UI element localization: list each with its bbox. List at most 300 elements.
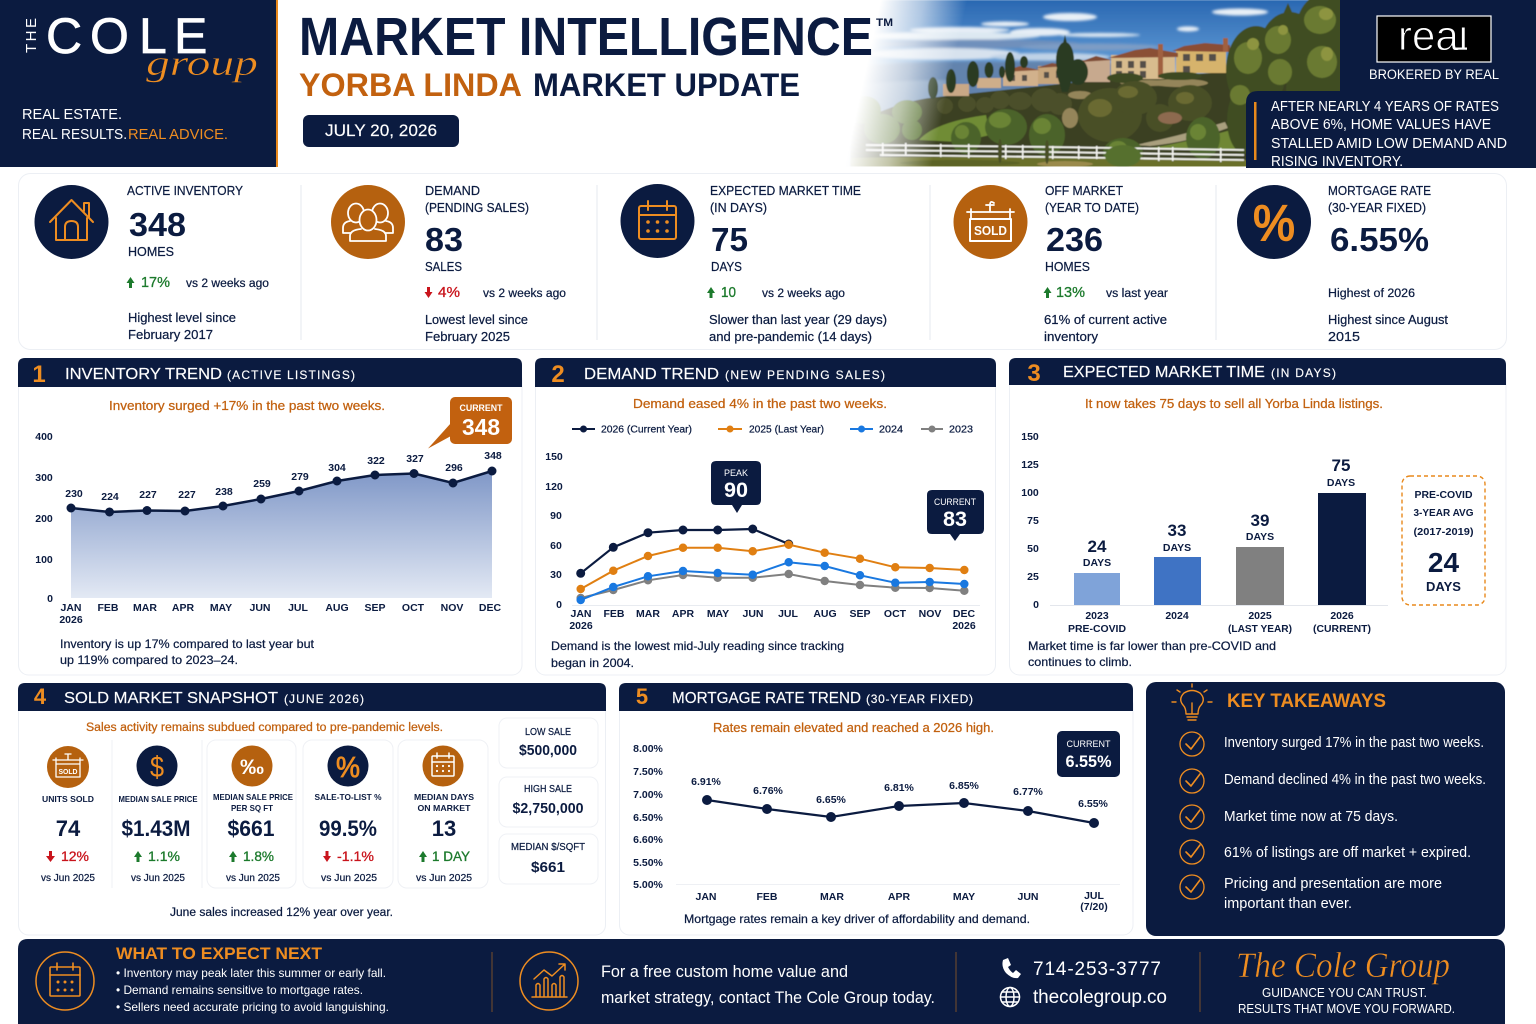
signature and slogan — [1236, 945, 1455, 1016]
KPI: mortgage rate: MORTGAGE RATE — [1328, 184, 1431, 198]
KPI: off market: inventory — [1044, 330, 1099, 344]
callout: peak 90: 90 — [724, 479, 748, 502]
header callout: STALLED AMID LOW DEMAND AND — [1271, 136, 1507, 152]
what to expect next: • Demand remains sensitive to mortgage rates. — [116, 983, 363, 997]
bar chart: 75 — [1332, 456, 1350, 475]
line chart: 7.00% — [633, 789, 664, 801]
KPI: mortgage rate: % — [1253, 195, 1295, 251]
stat: sale-to-list: SALE-TO-LIST % — [314, 792, 382, 802]
area chart: 279 — [291, 471, 309, 483]
stat: units sold — [41, 746, 95, 884]
KPI: demand: 4% — [438, 285, 460, 301]
KPI: active inventory: 348 — [129, 206, 186, 243]
note — [60, 637, 315, 667]
area chart: SEP — [364, 602, 386, 614]
line chart: JUN — [1017, 891, 1039, 903]
KPI: mortgage rate: Highest since August — [1328, 313, 1449, 327]
line chart: 2026 — [952, 620, 976, 632]
line chart: 6.55% — [1078, 798, 1109, 810]
KPI: mortgage rate — [1237, 184, 1449, 344]
bar chart: DAYS — [1083, 557, 1111, 569]
bar chart: 0 — [1033, 599, 1039, 611]
area chart: 400 — [35, 431, 53, 443]
header left brand panel — [0, 0, 278, 167]
real logo — [1377, 12, 1491, 62]
legend: 2026 (Current Year) — [601, 424, 692, 436]
KPI: demand: (PENDING SALES) — [425, 201, 529, 215]
line chart: 150 — [545, 451, 563, 463]
date pill — [303, 115, 459, 147]
bar chart — [1021, 431, 1388, 635]
bar chart: (LAST YEAR) — [1228, 623, 1292, 635]
KPI: demand: 83 — [425, 221, 463, 258]
area chart: 238 — [215, 486, 233, 498]
date pill: JULY 20, 2026 — [325, 122, 437, 140]
stat: median sale price — [118, 746, 198, 884]
KPI: expected market time: vs 2 weeks ago — [762, 288, 845, 300]
pre-covid average box: 3-YEAR AVG — [1414, 507, 1474, 519]
subtitle: YORBA LINDA — [299, 67, 522, 103]
fence — [866, 145, 1244, 160]
heading 3: 3 — [1027, 360, 1041, 387]
area chart: 200 — [35, 513, 53, 525]
stat: median sale price per sq ft: $661 — [228, 816, 274, 841]
KPI: off market: 236 — [1046, 221, 1103, 258]
line chart: 6.60% — [633, 834, 664, 846]
card: high sale: HIGH SALE — [524, 784, 572, 795]
logo: The Cole Group: COLE — [46, 8, 207, 64]
area chart: 227 — [178, 489, 196, 501]
KPI strip — [18, 174, 1506, 350]
stat: median days on market: MEDIAN DAYS — [414, 792, 474, 802]
heading 4 — [18, 683, 606, 711]
bar chart: DAYS — [1327, 477, 1355, 489]
heading 5 — [619, 683, 1133, 711]
KPI: expected market time: 75 — [711, 221, 748, 258]
takeaway 3 — [1180, 805, 1398, 829]
logo: The Cole Group — [23, 8, 258, 83]
heading 2: (NEW PENDING SALES) — [725, 368, 885, 382]
bar chart: 39 — [1251, 511, 1269, 530]
heading 1: (ACTIVE LISTINGS) — [227, 368, 355, 382]
line chart: 2026 — [569, 620, 593, 632]
subtitle: MARKET UPDATE — [533, 67, 800, 103]
KPI: expected market time: EXPECTED MARKET TIME — [710, 184, 861, 198]
callout: current 6.55%: CURRENT — [1066, 739, 1111, 750]
tagline: REAL RESULTS. — [22, 127, 127, 143]
takeaway 4 — [1180, 840, 1471, 864]
icon: growth chart — [520, 952, 578, 1010]
KPI: active inventory: Highest level since — [128, 311, 236, 325]
stat: median sale price: $1.43M — [122, 816, 190, 841]
area chart: 230 — [65, 488, 83, 500]
stat: units sold: 74 — [56, 816, 81, 841]
line chart: FEB — [604, 608, 625, 620]
heading 1 — [18, 358, 522, 388]
line chart: APR — [672, 608, 695, 620]
tagline: REAL ESTATE. — [22, 107, 122, 123]
line chart: JAN — [695, 891, 717, 903]
legend: 2025 (Last Year) — [749, 424, 824, 436]
heading 2 — [535, 358, 996, 388]
bar chart: 2025 — [1248, 610, 1272, 622]
stat: median sale price per sq ft: vs Jun 2025 — [226, 873, 280, 884]
area chart: 227 — [139, 489, 157, 501]
panel 1: inventory trend: Inventory surged +17% in the past two weeks. — [109, 399, 385, 413]
bar chart: 33 — [1168, 521, 1186, 540]
KPI: off market: 61% of current active — [1044, 313, 1167, 327]
stat: sale-to-list: % — [336, 752, 360, 784]
what to expect next: • Sellers need accurate pricing to avoid languishing. — [116, 1000, 389, 1014]
note: began in 2004. — [551, 656, 634, 670]
callout: peak 90: PEAK — [724, 468, 748, 478]
panel 5: mortgage rate trend: Rates remain elevated and reached a 2026 high. — [713, 721, 994, 735]
signature and slogan: GUIDANCE YOU CAN TRUST. — [1262, 986, 1427, 1000]
panel 3: expected market time: It now takes 75 days to sell all Yorba Linda listings. — [1085, 397, 1383, 411]
card: median $/sqft: $661 — [531, 860, 565, 876]
call to action: market strategy, contact The Cole Group today. — [601, 988, 935, 1007]
pre-covid average box: (2017-2019) — [1414, 526, 1474, 538]
stat: units sold: vs Jun 2025 — [41, 873, 95, 884]
KPI: active inventory: HOMES — [128, 245, 174, 259]
stat: units sold: UNITS SOLD — [42, 794, 94, 804]
callout: current 348 — [428, 397, 512, 448]
stat: sale-to-list: -1.1% — [337, 849, 374, 864]
foreground grass — [850, 157, 1250, 167]
card: low sale: LOW SALE — [525, 727, 571, 738]
card: median $/sqft — [499, 834, 598, 884]
KPI: expected market time: (IN DAYS) — [710, 201, 767, 215]
line chart: 6.50% — [633, 812, 664, 824]
signature and slogan: The Cole Group — [1236, 945, 1450, 985]
card: low sale — [499, 718, 598, 768]
line chart: 7.50% — [633, 766, 664, 778]
bar chart: 2026 — [1330, 610, 1354, 622]
area chart: 304 — [328, 462, 346, 474]
KPI: active inventory: ACTIVE INVENTORY — [127, 184, 244, 198]
callout: current 348: 348 — [462, 414, 500, 440]
hillside — [852, 72, 1288, 161]
note: continues to climb. — [1028, 655, 1132, 669]
footer band — [18, 939, 1505, 1024]
line chart: JAN — [570, 608, 592, 620]
card: low sale: $500,000 — [519, 743, 577, 759]
stat: median sale price: vs Jun 2025 — [131, 873, 185, 884]
heading 3: (IN DAYS) — [1271, 366, 1336, 380]
stat: median sale price per sq ft: MEDIAN SALE PRICE — [213, 792, 293, 802]
stat: median sale price per sq ft — [213, 746, 293, 884]
takeaway 2: Demand declined 4% in the past two weeks. — [1224, 772, 1486, 788]
callout: current 348: CURRENT — [460, 403, 503, 413]
takeaway 5: important than ever. — [1224, 896, 1352, 912]
heading 2: DEMAND TREND — [584, 366, 719, 383]
KPI: expected market time: 10 — [721, 285, 736, 301]
line chart: JUL — [778, 608, 799, 620]
KPI: expected market time — [620, 184, 887, 344]
bar chart: 100 — [1021, 487, 1039, 499]
bar chart: PRE-COVID — [1068, 623, 1126, 635]
KPI: off market: SOLD — [974, 224, 1007, 238]
icon: light bulb — [1172, 684, 1212, 720]
takeaway 5: Pricing and presentation are more — [1224, 876, 1442, 892]
heading 5: (30-YEAR FIXED) — [866, 692, 973, 706]
stat: sale-to-list: 99.5% — [319, 816, 377, 841]
KPI: demand: February 2025 — [425, 330, 510, 344]
heading 1: 1 — [32, 361, 46, 388]
line chart: (7/20) — [1080, 901, 1108, 913]
KPI: expected market time: Slower than last year (29 days) — [709, 313, 887, 327]
KPI: active inventory: February 2017 — [128, 328, 213, 342]
heading 1: INVENTORY TREND — [65, 366, 222, 383]
area chart: NOV — [441, 602, 463, 614]
heading 5: MORTGAGE RATE TREND — [672, 690, 861, 707]
contact: phone: 714-253-3777 — [1033, 959, 1161, 980]
brokerage panel: BROKERED BY REAL — [1369, 67, 1499, 82]
brokerage panel — [1340, 0, 1536, 100]
KPI: off market: HOMES — [1045, 260, 1090, 274]
note: June sales increased 12% year over year. — [170, 907, 393, 919]
card: median $/sqft: MEDIAN $/SQFT — [511, 842, 585, 853]
panel 3: expected market time — [1009, 358, 1506, 675]
KPI: mortgage rate: 6.55% — [1330, 221, 1429, 258]
KPI: demand — [331, 184, 566, 344]
line chart: 8.00% — [633, 743, 664, 755]
main title: MARKET INTELLIGENCE — [299, 7, 873, 67]
stat: sale-to-list — [314, 746, 382, 884]
line chart: 5.00% — [633, 879, 664, 891]
callout: current 83: 83 — [943, 508, 967, 531]
line chart: MAY — [953, 891, 975, 903]
area chart: FEB — [98, 602, 119, 614]
header callout: ABOVE 6%, HOME VALUES HAVE — [1271, 117, 1491, 133]
stat: median sale price: MEDIAN SALE PRICE — [118, 794, 198, 804]
KPI: off market — [954, 184, 1168, 344]
logo: The Cole Group: THE — [23, 18, 40, 53]
note: Demand is the lowest mid-July reading since tracking — [551, 639, 844, 653]
tagline — [22, 107, 228, 143]
call to action: For a free custom home value and — [601, 962, 848, 981]
line chart: APR — [888, 891, 911, 903]
area chart: 0 — [47, 593, 53, 605]
stat: median days on market — [414, 746, 474, 884]
area chart: APR — [172, 602, 195, 614]
signature and slogan: RESULTS THAT MOVE YOU FORWARD. — [1238, 1002, 1455, 1016]
panel: key takeaways: KEY TAKEAWAYS — [1227, 691, 1386, 712]
line chart: MAR — [820, 891, 844, 903]
callout: current 83: CURRENT — [934, 497, 976, 507]
callout: current 83 — [927, 490, 984, 541]
what to expect next — [116, 944, 389, 1014]
panel 5: mortgage rate trend — [619, 683, 1133, 935]
stat: median sale price per sq ft: ‰ — [240, 756, 264, 779]
pre-covid average box — [1402, 476, 1485, 605]
takeaway 4: 61% of listings are off market + expired. — [1224, 845, 1471, 861]
KPI: off market: 13% — [1056, 285, 1085, 301]
line chart: 6.65% — [816, 794, 847, 806]
KPI: mortgage rate: 2015 — [1328, 330, 1360, 344]
legend: 2024 — [879, 424, 903, 436]
heading 4: SOLD MARKET SNAPSHOT — [64, 690, 279, 707]
stat: median sale price: $ — [150, 751, 164, 784]
KPI: active inventory: 17% — [141, 275, 170, 291]
header photo: hillside homes — [850, 0, 1340, 166]
KPI: expected market time: DAYS — [711, 260, 742, 274]
callout: peak 90 — [711, 461, 761, 513]
contact: website: thecolegroup.co — [1033, 987, 1167, 1008]
KPI: demand: SALES — [425, 260, 462, 274]
KPI: expected market time: and pre-pandemic (14 days) — [709, 330, 872, 344]
pre-covid average box: 24 — [1428, 547, 1459, 578]
line chart: MAY — [707, 608, 729, 620]
pines — [928, 35, 1088, 99]
line chart: 30 — [550, 569, 562, 581]
icon: calendar — [36, 952, 94, 1010]
takeaway 1 — [1180, 732, 1484, 756]
heading 4: (JUNE 2026) — [284, 692, 364, 706]
area chart: DEC — [479, 602, 502, 614]
line chart: DEC — [953, 608, 976, 620]
area chart: 300 — [35, 472, 53, 484]
area chart — [35, 431, 502, 626]
real logo: real — [1398, 12, 1468, 59]
stat: units sold: SOLD — [58, 767, 78, 776]
logo: The Cole Group: group — [146, 43, 258, 83]
line chart: MAR — [636, 608, 660, 620]
bar chart: DAYS — [1163, 542, 1191, 554]
line chart: 60 — [550, 540, 562, 552]
heading 3 — [1009, 358, 1506, 387]
bar chart: DAYS — [1246, 531, 1274, 543]
main title: TM — [876, 17, 893, 29]
line chart: 90 — [550, 510, 562, 522]
panel 4: sold market snapshot: Sales activity remains subdued compared to pre-pandemic levels. — [86, 722, 443, 734]
area chart: 348 — [484, 450, 502, 462]
KPI: off market: vs last year — [1106, 288, 1168, 300]
houses — [943, 38, 1230, 96]
hill shrubs — [937, 88, 1072, 115]
heading 2: 2 — [551, 361, 565, 388]
line chart: 6.85% — [949, 780, 980, 792]
KPI: active inventory — [34, 184, 269, 342]
legend: 2023 — [949, 424, 973, 436]
KPI: demand: vs 2 weeks ago — [483, 288, 566, 300]
takeaway 2 — [1180, 769, 1486, 793]
panel 4: sold market snapshot — [18, 683, 606, 935]
stat: median sale price per sq ft: PER SQ FT — [231, 803, 274, 813]
area chart: JAN — [60, 602, 82, 614]
subtitle — [299, 67, 800, 103]
area chart: MAR — [133, 602, 157, 614]
note: Inventory is up 17% compared to last year but — [60, 637, 315, 651]
line chart: 0 — [556, 599, 562, 611]
panel 1: inventory trend — [18, 358, 522, 675]
pre-covid average box: PRE-COVID — [1414, 489, 1473, 501]
line chart: NOV — [919, 608, 941, 620]
KPI: active inventory: vs 2 weeks ago — [186, 278, 269, 290]
stat: sale-to-list: vs Jun 2025 — [321, 873, 377, 884]
takeaway 3: Market time now at 75 days. — [1224, 809, 1398, 825]
note — [1028, 639, 1276, 669]
bar chart: 2024 — [1165, 610, 1189, 622]
note: Mortgage rates remain a key driver of affordability and demand. — [684, 912, 1030, 926]
area chart: MAY — [210, 602, 232, 614]
header callout: RISING INVENTORY. — [1271, 154, 1403, 170]
heading 5: 5 — [636, 684, 648, 709]
area chart: JUL — [288, 602, 309, 614]
callout: current 6.55% — [1057, 731, 1120, 777]
what to expect next: • Inventory may peak later this summer or early fall. — [116, 966, 386, 980]
stat: median days on market: 1 DAY — [432, 849, 470, 864]
tagline: REAL ADVICE. — [128, 127, 228, 143]
stat: median days on market: 13 — [432, 816, 456, 841]
legend — [572, 424, 973, 436]
line chart: 6.76% — [753, 785, 784, 797]
line chart — [545, 451, 980, 632]
takeaway 5 — [1180, 875, 1442, 912]
right trees — [1225, 0, 1340, 154]
callout: current 6.55%: 6.55% — [1066, 752, 1112, 771]
bar chart: 150 — [1021, 431, 1039, 443]
bar chart: 2023 — [1085, 610, 1109, 622]
stat: median sale price: 1.1% — [148, 849, 180, 864]
bar chart: 125 — [1021, 459, 1039, 471]
what to expect next: WHAT TO EXPECT NEXT — [116, 944, 323, 963]
line chart: OCT — [884, 608, 907, 620]
KPI: mortgage rate: Highest of 2026 — [1328, 288, 1415, 300]
panel 2: demand trend: Demand eased 4% in the past two weeks. — [633, 397, 887, 411]
line chart: 120 — [545, 481, 563, 493]
card: high sale — [499, 777, 598, 827]
header callout — [1246, 91, 1536, 170]
takeaway 1: Inventory surged 17% in the past two weeks. — [1224, 735, 1484, 751]
area chart: 322 — [367, 455, 385, 467]
panel: key takeaways — [1146, 682, 1505, 936]
stat: median days on market: ON MARKET — [418, 803, 471, 813]
heading 3: EXPECTED MARKET TIME — [1063, 364, 1265, 381]
grass patch — [919, 115, 990, 142]
line chart: 5.50% — [633, 857, 664, 869]
stat: median days on market: vs Jun 2025 — [416, 873, 472, 884]
line chart — [633, 743, 1120, 913]
line chart: SEP — [849, 608, 871, 620]
line chart: JUN — [742, 608, 764, 620]
area chart: AUG — [325, 602, 349, 614]
bar chart: 25 — [1027, 571, 1039, 583]
KPI: off market: (YEAR TO DATE) — [1045, 201, 1139, 215]
area chart: 259 — [253, 478, 271, 490]
stat: units sold: 12% — [61, 849, 89, 864]
front trees — [951, 109, 1220, 168]
bar chart: 75 — [1027, 515, 1039, 527]
area chart: 224 — [101, 491, 119, 503]
area chart: OCT — [402, 602, 425, 614]
KPI: mortgage rate: (30-YEAR FIXED) — [1328, 201, 1426, 215]
pre-covid average box: DAYS — [1426, 579, 1461, 594]
note: up 119% compared to 2023–24. — [60, 653, 238, 667]
area chart: 100 — [35, 554, 53, 566]
heading 4: 4 — [34, 684, 47, 709]
KPI: off market: OFF MARKET — [1045, 184, 1123, 198]
line chart: FEB — [756, 891, 778, 903]
header callout: AFTER NEARLY 4 YEARS OF RATES — [1271, 99, 1499, 115]
line chart: JUL — [1084, 890, 1105, 902]
area chart: 2026 — [59, 614, 83, 626]
line chart: AUG — [813, 608, 837, 620]
call to action — [601, 962, 935, 1007]
panel 2: demand trend — [535, 358, 996, 675]
area chart: 296 — [445, 462, 463, 474]
stat: median sale price per sq ft: 1.8% — [243, 849, 274, 864]
